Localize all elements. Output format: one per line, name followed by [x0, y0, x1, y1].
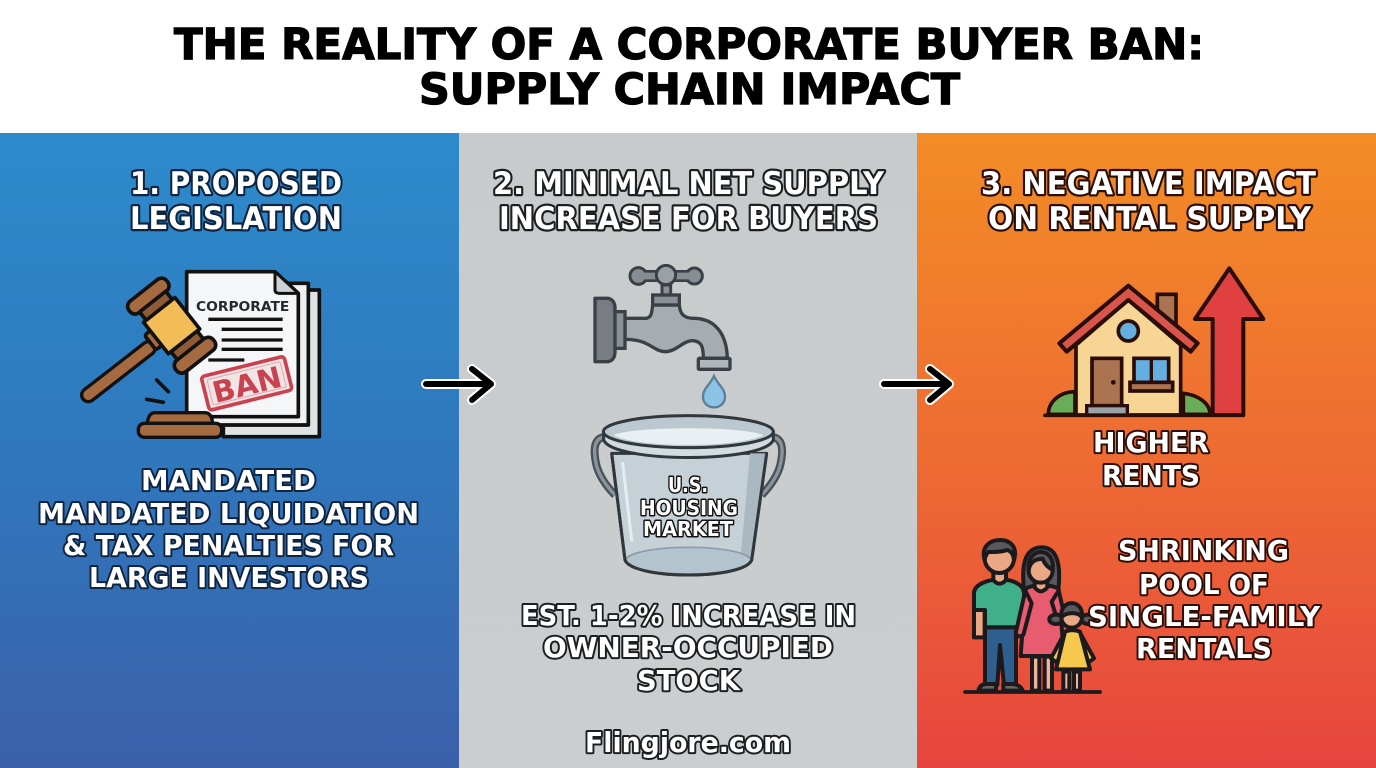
text: shrinking pool of single-family rentals: RENTALS [1136, 632, 1272, 665]
heading: negative impact: ON RENTAL SUPPLY [988, 201, 1312, 237]
text: mandated liquidation and tax penalties: MANDATED [141, 464, 316, 497]
heading: proposed legislation: 1. PROPOSED [130, 166, 342, 202]
icon: water drop [703, 376, 725, 407]
woman [1016, 547, 1064, 691]
text: estimated increase in owner-occupied stock: EST. 1-2% INCREASE IN [521, 599, 856, 632]
text: estimated increase in owner-occupied stock: OWNER-OCCUPIED [543, 631, 833, 664]
text: mandated liquidation and tax penalties: & TAX PENALTIES FOR [63, 529, 394, 562]
text: estimated increase in owner-occupied stock: STOCK [637, 664, 741, 697]
girl [1049, 603, 1095, 691]
heading: minimal net supply: 2. MINIMAL NET SUPPLY [493, 166, 885, 202]
panel: negative impact on rental supply [917, 133, 1376, 768]
arrow: step 2 to step 3 [884, 369, 949, 400]
icon: gavel and ban document [88, 272, 319, 437]
title: SUPPLY CHAIN IMPACT [419, 65, 961, 115]
title [174, 20, 1204, 115]
text: estimated increase in owner-occupied stock [521, 599, 856, 697]
icon: gavel and ban document: BAN [209, 360, 285, 410]
text: higher rents: RENTS [1102, 459, 1200, 492]
heading: negative impact: 3. NEGATIVE IMPACT [981, 166, 1316, 202]
heading: minimal net supply [493, 166, 885, 237]
panel: proposed legislation [0, 133, 459, 768]
bucket label: U.S. housing market: U.S. [668, 473, 708, 497]
text: higher rents [1093, 426, 1209, 492]
text: shrinking pool of single-family rentals: SINGLE-FAMILY [1088, 600, 1321, 633]
heading: proposed legislation: LEGISLATION [130, 201, 342, 237]
text: mandated liquidation and tax penalties [38, 464, 419, 594]
panel: minimal net supply increase [459, 133, 917, 768]
title: THE REALITY OF A CORPORATE BUYER BAN: [174, 20, 1204, 70]
arrow: step 1 to step 2 [426, 369, 491, 400]
bucket label: U.S. housing market [640, 473, 738, 541]
text: mandated liquidation and tax penalties: LARGE INVESTORS [89, 561, 369, 594]
text: shrinking pool of single-family rentals: SHRINKING [1118, 534, 1289, 567]
text: higher rents: HIGHER [1093, 426, 1209, 459]
icon: bucket [595, 416, 782, 575]
source: Flingjore.com: Flingjore.com [585, 726, 791, 759]
heading: proposed legislation [130, 166, 342, 237]
heading: minimal net supply: INCREASE FOR BUYERS [499, 201, 878, 237]
icon: family [965, 540, 1100, 692]
icon: gavel and ban document: CORPORATE [196, 300, 289, 315]
heading: negative impact [981, 166, 1316, 237]
icon: dripping faucet [595, 265, 730, 369]
text: mandated liquidation and tax penalties: MANDATED LIQUIDATION [38, 497, 419, 530]
bucket label: U.S. housing market: MARKET [643, 517, 733, 541]
bucket label: U.S. housing market: HOUSING [640, 496, 738, 520]
text: shrinking pool of single-family rentals: POOL OF [1139, 568, 1269, 601]
icon: house with rising arrow [1045, 268, 1263, 415]
text: shrinking pool of single-family rentals [1088, 534, 1321, 665]
man [974, 540, 1024, 691]
